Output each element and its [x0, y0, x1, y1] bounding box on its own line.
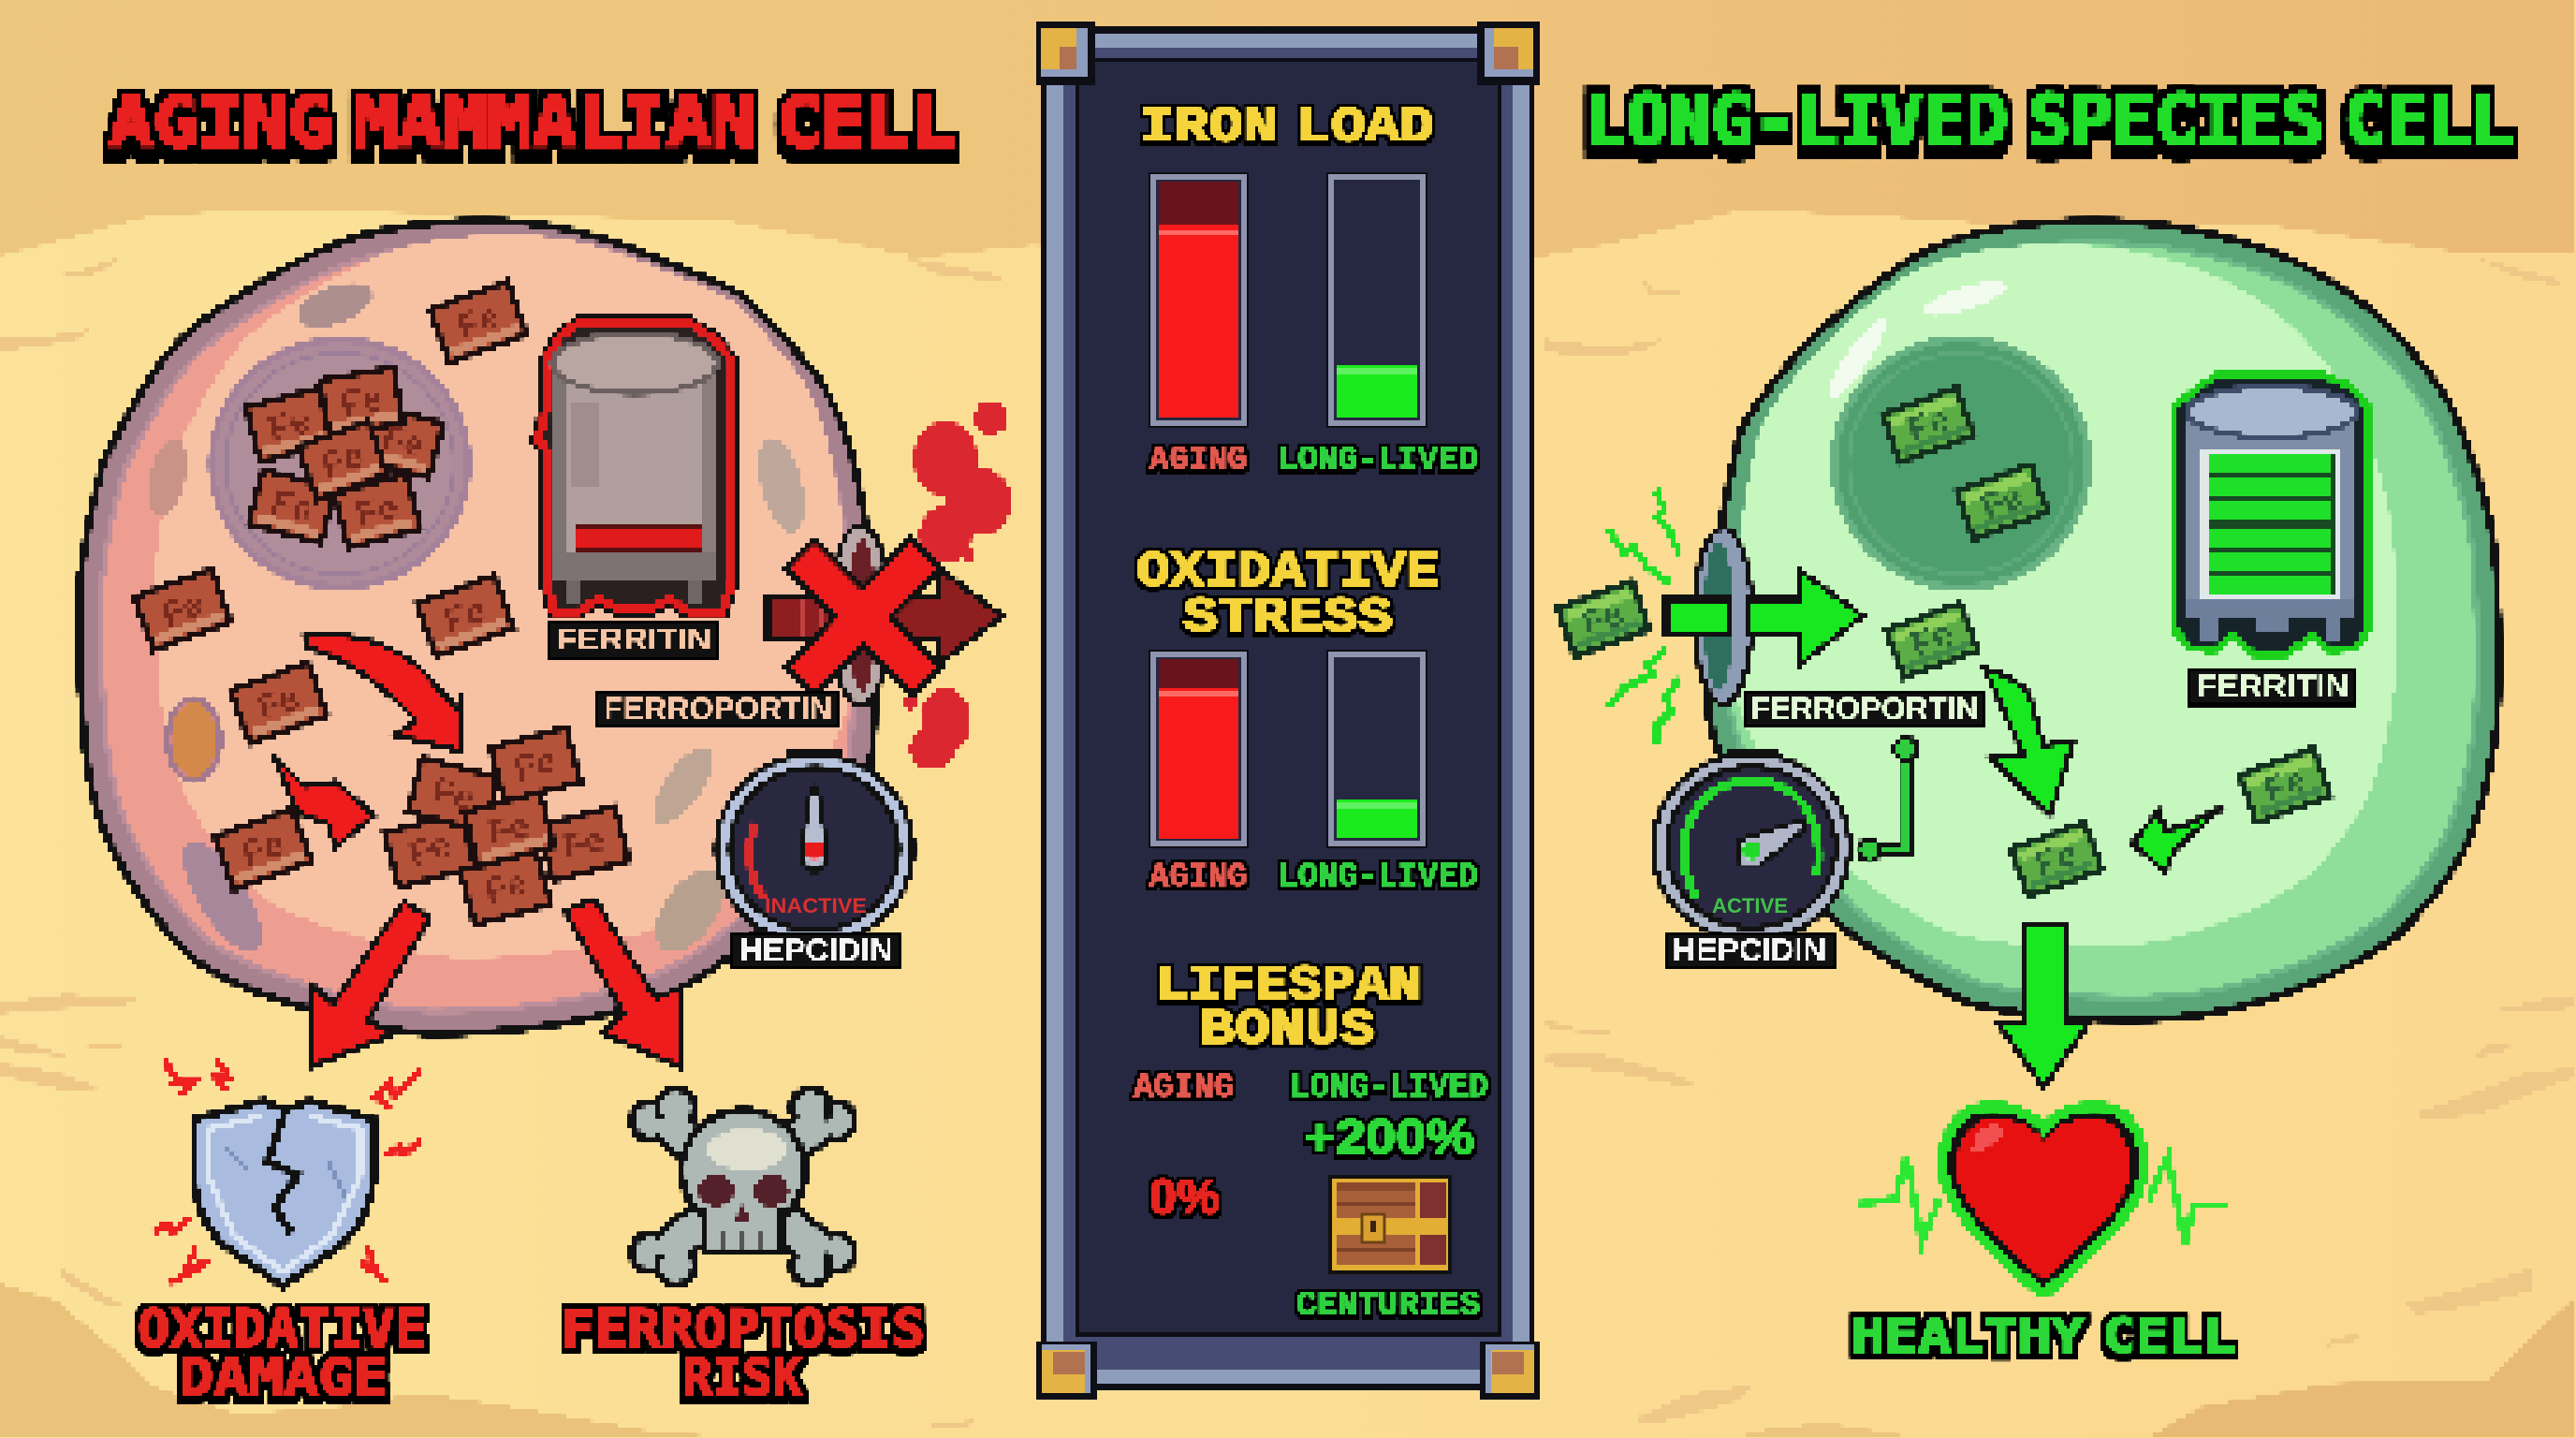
arrow: iron flow down	[1984, 668, 2073, 815]
outcome label: healthy cell: HEALTHY CELL	[1852, 1309, 2235, 1363]
label: ferroportin: FERROPORTIN	[604, 691, 832, 726]
heading: oxidative stress	[1136, 544, 1440, 646]
iron cluster: Fe	[510, 741, 561, 789]
gauge label: inactive: INACTIVE	[765, 894, 867, 917]
bar: iron load aging	[1149, 172, 1249, 428]
panel: comparison scoreboard	[1036, 22, 1540, 1400]
cell body: long-lived	[1706, 221, 2498, 1020]
ferritin: healthy	[2174, 374, 2368, 655]
ferritin: damaged	[538, 323, 732, 611]
value: 0%: 0%	[1149, 1170, 1220, 1225]
gauge: hepcidin active	[1653, 749, 1850, 941]
red X fill	[814, 567, 912, 667]
loose iron blocks: aging: Fe	[452, 297, 505, 347]
nucleus: long-lived	[1834, 339, 2088, 588]
iron blocks in nucleus	[246, 368, 444, 548]
lifespan labels: AGING	[1134, 1068, 1234, 1107]
outcome label: oxidative damage	[138, 1299, 427, 1407]
iron blocks in nucleus: Fe	[338, 378, 385, 425]
bar labels: iron load: LONG-LIVED	[1278, 441, 1478, 479]
membrane highlights	[1821, 274, 2009, 404]
nucleus: aging	[212, 340, 468, 587]
iron cluster: Fe	[484, 805, 534, 854]
iron blocks: long-lived: Fe	[1976, 477, 2028, 527]
outcome label: ferroptosis risk	[562, 1299, 925, 1407]
iron blocks: long-lived: Fe	[1902, 400, 1954, 450]
label: hepcidin: HEPCIDIN	[739, 932, 893, 967]
outcome label: oxidative damage: OXIDATIVE	[138, 1299, 427, 1358]
bar labels: iron load	[1149, 441, 1478, 479]
heading: oxidative stress: OXIDATIVE	[1136, 544, 1440, 600]
sparks: oxidative damage	[153, 1059, 420, 1284]
label: ferroportin: FERROPORTIN	[1750, 691, 1979, 726]
arrow: iron export through ferroportin, head	[1749, 571, 1863, 664]
label: ferritin: FERRITIN	[556, 622, 711, 656]
blood splashes	[902, 401, 1012, 770]
label: centuries: CENTURIES	[1296, 1286, 1480, 1325]
heading: lifespan bonus: BONUS	[1200, 1002, 1375, 1058]
bar: oxidative stress aging	[1149, 650, 1249, 848]
arrow: blocked iron export	[768, 568, 1002, 664]
arrow: iron flow left	[2132, 806, 2224, 872]
iron cluster: Fe	[428, 770, 478, 819]
icon: treasure chest	[1330, 1177, 1450, 1272]
arrow: iron export through ferroportin, tail	[1666, 599, 1730, 636]
iron blocks in nucleus: Fe	[378, 418, 429, 466]
iron cluster: Fe	[559, 819, 609, 868]
iron cluster	[385, 727, 629, 925]
gauge label: active: ACTIVE	[1712, 894, 1788, 917]
lifespan labels: LONG-LIVED	[1290, 1068, 1488, 1107]
iron blocks: long-lived: Fe	[1906, 615, 1958, 666]
sparks: iron export	[1607, 490, 1679, 745]
outcome label: ferroptosis risk: FERROPTOSIS	[562, 1299, 925, 1358]
loose iron blocks: aging: Fe	[156, 584, 209, 635]
icon: skull and crossbones	[632, 1089, 855, 1284]
iron cluster: Fe	[404, 826, 455, 874]
iron blocks in nucleus: Fe	[267, 482, 317, 531]
value: +200%: +200%	[1304, 1110, 1474, 1165]
arrow: to ferroptosis risk	[564, 899, 680, 1066]
iron cluster: Fe	[480, 863, 531, 912]
frame corners	[1036, 22, 1540, 1400]
bar labels: oxidative stress	[1149, 858, 1478, 896]
bar: oxidative stress long-lived	[1326, 650, 1427, 848]
gauge: hepcidin inactive	[716, 749, 913, 944]
lifespan labels	[1134, 1068, 1488, 1107]
frame	[1041, 26, 1534, 1390]
bar: iron load long-lived	[1326, 172, 1427, 428]
iron blocks: long-lived: Fe	[1577, 594, 1630, 644]
outcome label: oxidative damage: DAMAGE	[179, 1347, 388, 1407]
bar labels: oxidative stress: LONG-LIVED	[1278, 858, 1478, 896]
red X	[814, 567, 912, 667]
panel: long-lived species cell	[1558, 81, 2513, 1363]
cell body: aging	[79, 221, 874, 1034]
iron blocks in nucleus: Fe	[264, 401, 315, 449]
iron blocks: long-lived: Fe	[2259, 760, 2311, 811]
heading: lifespan bonus	[1155, 958, 1422, 1058]
arrow: to healthy cell	[1998, 924, 2089, 1087]
iron blocks in nucleus: Fe	[316, 435, 369, 486]
icon: cracked shield	[194, 1101, 374, 1286]
bar labels: oxidative stress: AGING	[1149, 858, 1247, 896]
ferroportin: blocked pore	[830, 525, 890, 705]
title: aging mammalian cell: AGING MAMMALIAN CELL	[109, 82, 956, 163]
ferroportin: open pore	[1694, 528, 1752, 704]
label: ferritin: FERRITIN	[2196, 668, 2349, 703]
arrow: curved iron flow 1	[304, 635, 460, 751]
label: hepcidin: HEPCIDIN	[1673, 932, 1826, 967]
panel: aging mammalian cell	[79, 82, 1012, 1407]
heading: oxidative stress: STRESS	[1183, 590, 1393, 646]
iron blocks in nucleus: Fe	[352, 487, 402, 536]
heartbeat lines	[1856, 1156, 2228, 1242]
connector: hepcidin signal	[1858, 738, 1917, 861]
loose iron blocks: aging: Fe	[253, 678, 305, 728]
heading: iron load: IRON LOAD	[1140, 99, 1434, 155]
heading: lifespan bonus: LIFESPAN	[1155, 958, 1422, 1014]
organelles: aging	[142, 274, 814, 964]
bar labels: iron load: AGING	[1149, 441, 1247, 479]
outcome label: ferroptosis risk: RISK	[682, 1347, 802, 1407]
icon: heart with glow	[1948, 1112, 2139, 1288]
iron blocks: long-lived: Fe	[2030, 834, 2083, 885]
loose iron blocks: aging: Fe	[237, 824, 289, 874]
arrow: to oxidative damage	[312, 902, 431, 1066]
loose iron blocks: aging	[134, 282, 527, 889]
iron blocks: long-lived	[1558, 388, 2331, 897]
arrow: curved iron flow 2	[272, 754, 374, 847]
loose iron blocks: aging: Fe	[439, 591, 491, 641]
title: long-lived species cell: LONG-LIVED SPECIES CELL	[1584, 81, 2513, 161]
